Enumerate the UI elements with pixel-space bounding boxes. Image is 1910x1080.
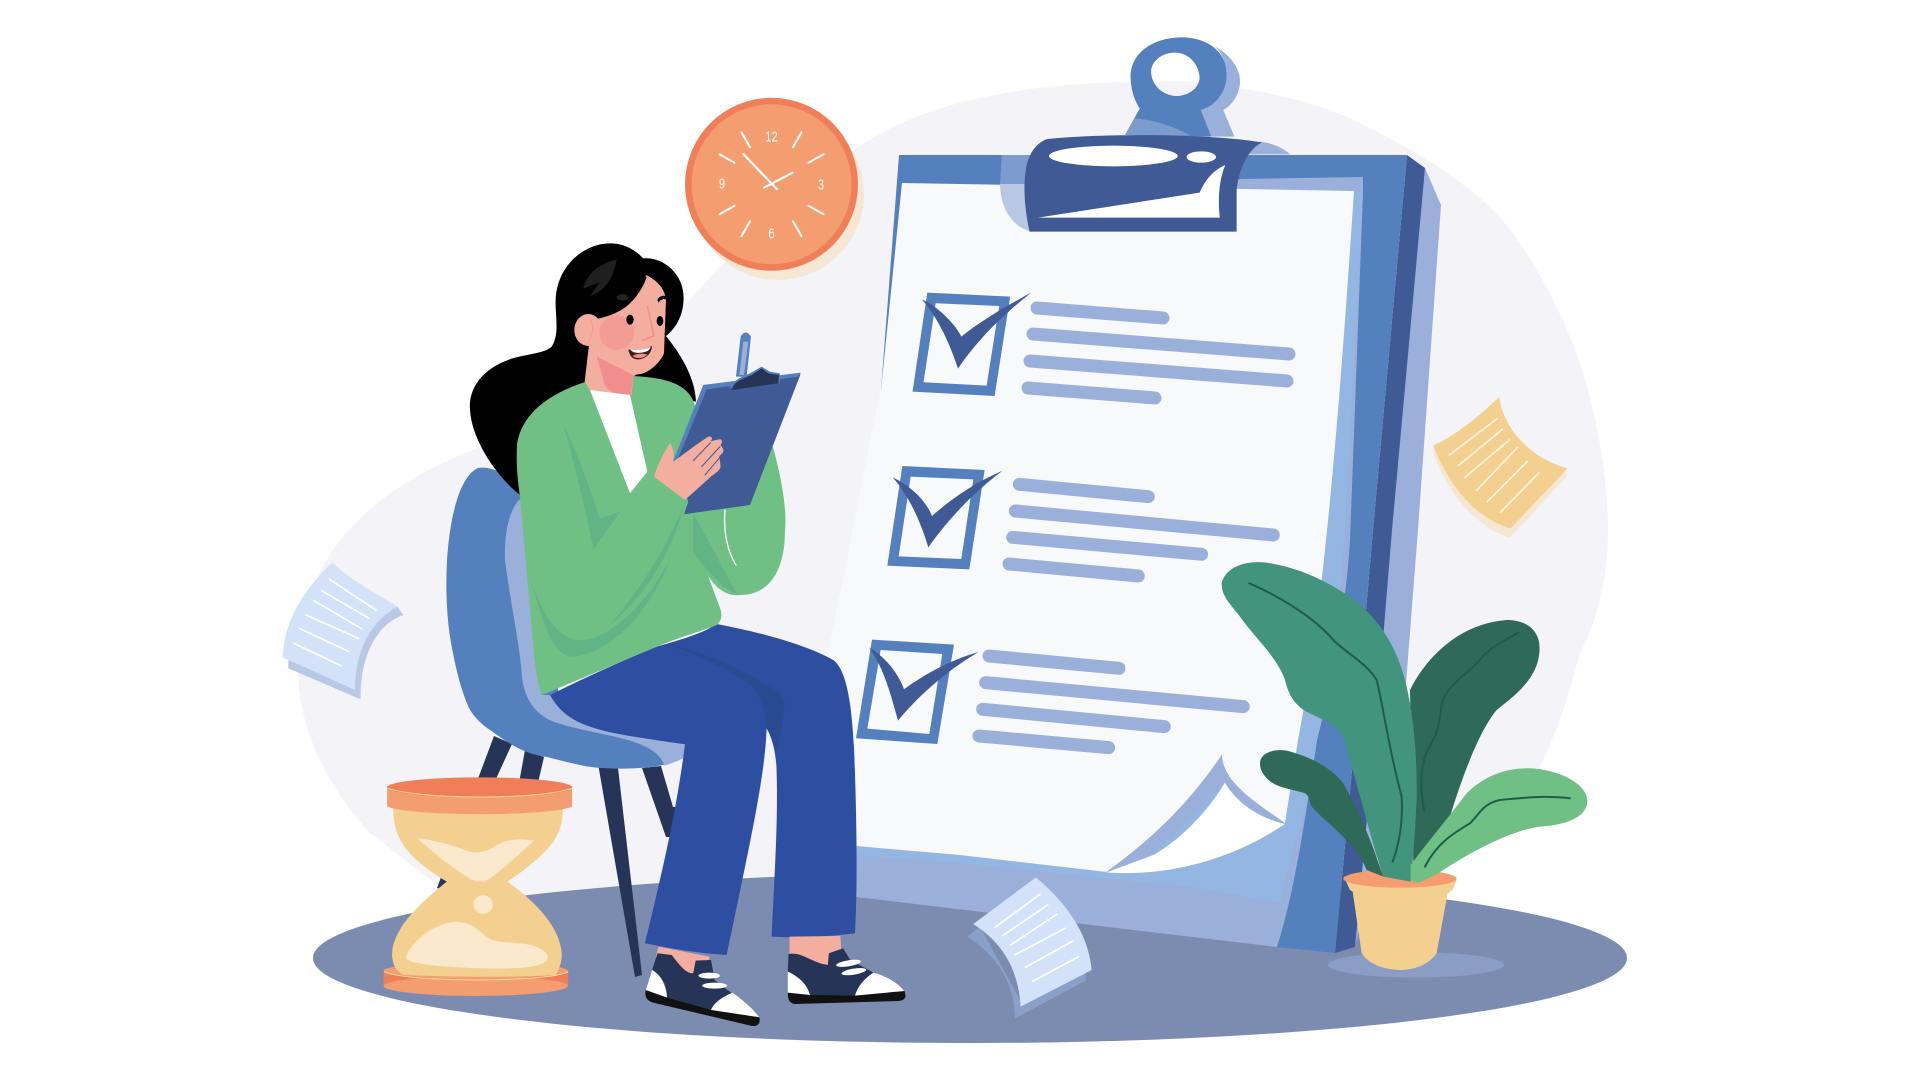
sleeve seam [610,503,685,625]
upper sand [417,838,534,882]
background blob [298,82,1608,950]
small dark leaf [1260,750,1383,877]
teal leaf [1222,562,1417,882]
text lines 3 [979,656,1243,748]
mouth [628,346,652,359]
falling sand [474,895,493,914]
pen [736,332,751,377]
chair cushion [505,500,685,766]
clipboard dark edge [1335,155,1425,953]
checklist items 2 and 3 [856,466,1273,748]
clock numerals: 3 [818,176,824,193]
hourglass glass [392,808,563,977]
clip ring hole [1151,53,1200,96]
far arm fold [693,513,737,593]
pot [1344,877,1457,970]
checkbox 3 [856,640,979,744]
back sheet [856,177,1363,947]
clock shadow [692,108,864,280]
chair legs [437,736,680,977]
clip ring neck shade [1125,118,1190,136]
hair shine [617,294,629,301]
clock ticks [720,132,824,236]
dark leaf right [1410,620,1540,867]
wall clock [685,98,864,280]
pot shadow [1328,952,1504,978]
ground ellipse [313,873,1627,1043]
text lines 1 [1028,308,1289,398]
clock numerals: 6 [768,225,775,242]
finger gaps [693,443,720,475]
clip back right [1241,142,1291,154]
paper: right yellow note [1433,397,1568,538]
cheek [599,315,634,350]
face and neck [585,275,666,395]
clock rim [685,98,858,271]
fringe [600,277,646,315]
large clipboard [800,37,1441,953]
curl shadow [1107,755,1285,872]
clip highlight large [1049,146,1178,166]
illustration: woman filling out a checklist [282,37,1627,1043]
clock hands [743,154,793,189]
page [800,183,1354,872]
hourglass base [384,970,568,987]
checklist item 1 [913,293,1289,398]
ear [574,314,602,346]
neck shadow [597,357,633,396]
small clipboard clip [729,367,780,388]
top clip [1000,37,1291,232]
page curl [1107,755,1285,873]
chair shell [446,468,685,769]
curl white [1107,783,1285,873]
clip back left on band [1000,155,1039,184]
hourglass [384,777,572,996]
shoes [645,936,906,1026]
middle sheet [856,192,1363,903]
teeth [630,347,651,353]
lower cardigan fold [530,560,670,657]
chair [437,468,685,977]
clock numerals [719,128,824,242]
tongue [633,354,647,358]
eyebrow [657,296,666,303]
clock face [692,104,852,264]
eyes [626,315,663,326]
woman [470,243,906,1026]
leaf veins [1249,583,1570,867]
clock numerals: 9 [719,175,725,192]
lower sand [406,922,548,969]
checkbox 2 [887,466,1003,569]
ear inner [588,319,593,343]
potted plant [1222,562,1587,978]
hair highlight [583,259,617,296]
clip highlight small [1187,151,1216,163]
text lines 2 [1009,484,1273,576]
undershirt [590,390,647,493]
cardigan [517,375,721,695]
clip back left [1000,183,1030,232]
checkbox 1 [913,293,1031,396]
clip ring shadow [1201,47,1240,137]
nose [642,306,654,341]
trouser fold [667,643,784,752]
clip lower highlight [1038,165,1225,218]
head and upper body detail [564,259,801,593]
paper: left blue note [283,562,403,699]
ankles [656,936,841,977]
hand [654,437,723,500]
soil rim [1343,870,1457,888]
left shoe [645,953,760,1026]
small clipboard [673,374,801,514]
clip body [1024,135,1262,232]
small clipboard clip dark [732,368,779,390]
hourglass cap [387,787,572,814]
trousers [550,624,857,955]
clock numerals: 12 [765,128,778,145]
far arm sleeve [680,447,785,595]
right shoe [788,948,906,1004]
sleeve highlight [725,510,736,565]
paper: floor note [967,877,1092,1018]
green leaf [1411,768,1587,883]
lapel fold [564,427,620,550]
clip ring [1125,37,1227,137]
clipboard board [881,155,1407,953]
hair [470,243,696,495]
clipboard side edge [1340,168,1441,947]
small clipboard edge [673,373,801,462]
